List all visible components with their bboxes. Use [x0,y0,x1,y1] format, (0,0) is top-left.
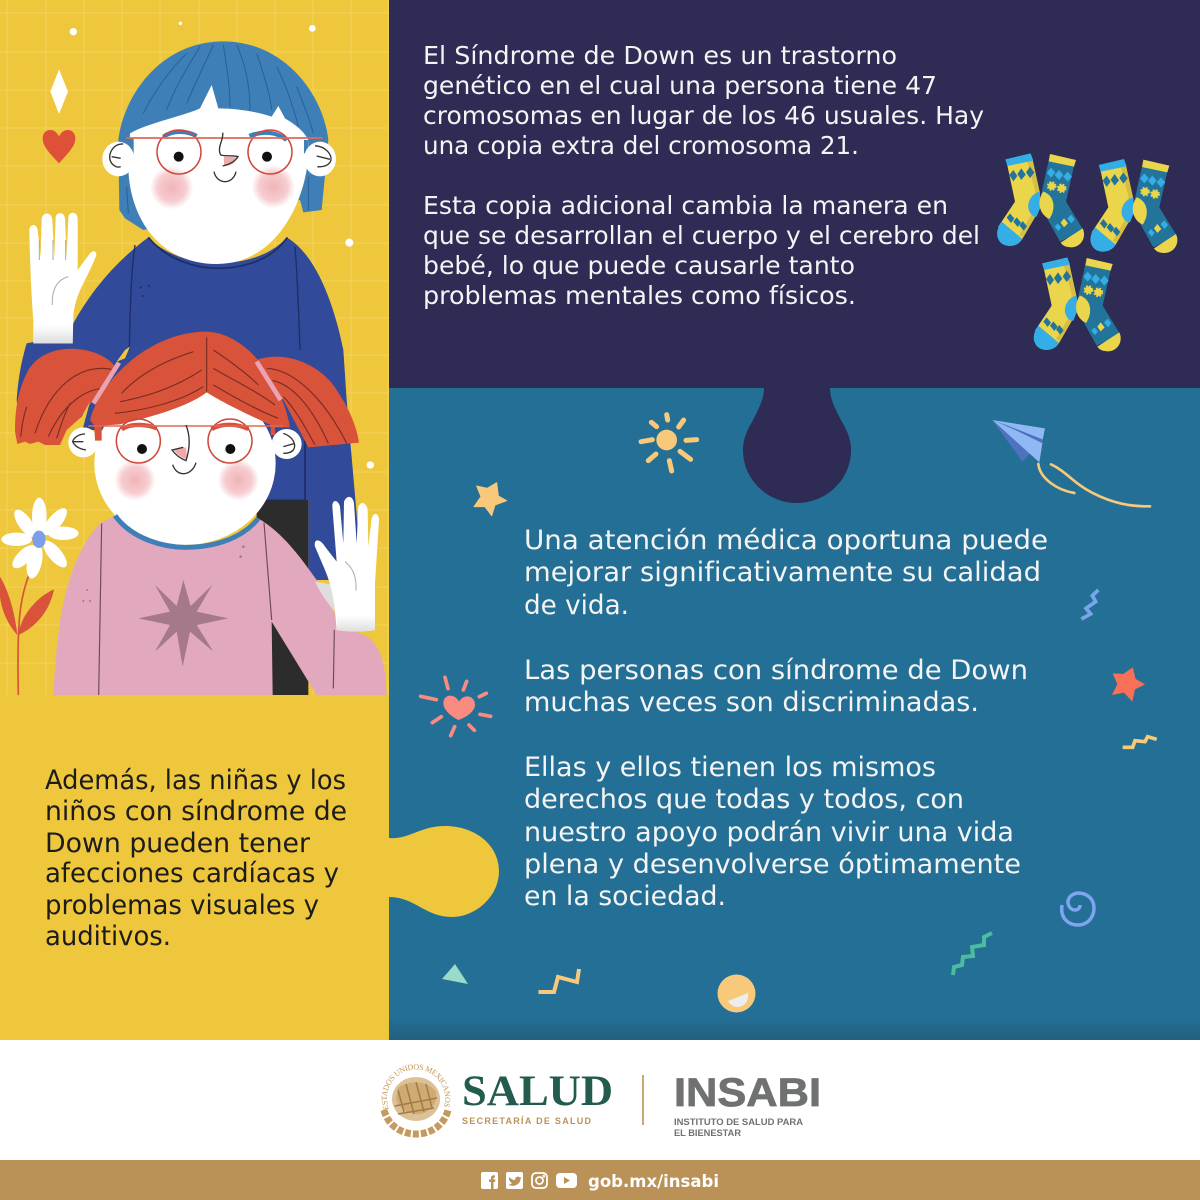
text: intro paragraph: El Síndrome de Down es un trastorno [423,41,897,70]
glasses [88,419,283,463]
hand right [315,582,334,612]
icon: red heart [43,130,75,163]
text: medical care [524,525,1048,621]
sweater [17,237,358,580]
text: second paragraph: Esta copia adicional cambia la manera en [423,191,948,220]
text: rights: Ellas y ellos tienen los mismos [524,752,936,783]
front hair [90,332,290,441]
logo: INSABI: INSABI [674,1071,821,1115]
dot [367,461,374,469]
text: rights: plena y desenvolverse óptimamente [524,849,1021,880]
social icons [481,1172,577,1189]
puzzle knob: yellow [389,826,499,917]
pigtails [15,349,115,445]
icon: blue zigzag [1081,590,1098,619]
icon: yellow zigzag bottom [538,969,579,992]
panel: lower blue [389,388,1200,1040]
text: intro paragraph: genético en el cual una persona tiene 47 [423,71,937,100]
text: discrimination [524,655,1028,718]
face [94,382,276,545]
panel: yellow under illustration [0,695,389,1040]
icon: red star [1112,667,1145,702]
nose and smile [173,447,187,459]
text: discrimination: muchas veces son discriminadas. [524,687,979,718]
nose and smile [224,157,237,166]
eyes [137,444,147,454]
text: intro paragraph: cromosomas en lugar de los 46 usuales. Hay [423,101,984,130]
logo: INSABI: EL BIENESTAR [674,1128,741,1139]
eyebrows [122,425,248,429]
divider [642,1075,644,1125]
logo: INSABI [674,1071,821,1139]
icon: heart with rays [421,677,491,736]
text: left column [45,765,347,952]
logo: coat of arms seal: ESTADOS UNIDOS MEXICANOS [382,1064,450,1110]
icon: sun [641,415,697,471]
eyebrows [163,132,197,137]
icon: green zigzag [953,933,992,975]
glasses [126,130,323,174]
icon: socks [997,153,1177,351]
ears [102,142,134,176]
logo: Salud: SALUD [462,1068,613,1115]
star on shirt [138,580,228,667]
shirt [53,516,387,695]
panel: white logo band [0,1040,1200,1160]
decor: dots [70,22,353,247]
text: medical care: mejorar significativamente su calidad [524,557,1041,588]
text: left column: auditivos. [45,921,171,952]
text: intro paragraph: una copia extra del cromosoma 21. [423,131,859,160]
text: left column: Down pueden tener [45,828,310,859]
cheeks [114,459,156,501]
icon: star yellow [474,483,507,516]
text: second paragraph: bebé, lo que puede causarle tanto [423,251,855,280]
panel: top navy [389,0,1200,388]
icon: instagram [532,1173,547,1188]
icon: smiling circle [718,974,756,1012]
icon: white diamond [50,69,68,114]
text: medical care: de vida. [524,590,629,621]
icon: spiral [1062,893,1094,925]
logo: Salud: SECRETARÍA DE SALUD [462,1116,592,1126]
text: second paragraph [423,191,980,310]
text: rights [524,752,1021,912]
puzzle knob: navy [743,388,851,503]
icon: paper plane [992,420,1150,506]
text: left column: problemas visuales y [45,890,319,921]
younger child [0,332,387,695]
text: left column: afecciones cardíacas y [45,858,339,889]
text: left column: Además, las niñas y los [45,765,346,796]
icon: teal triangle [442,964,468,984]
illustration: children waving [0,0,389,695]
text: discrimination: Las personas con síndrome de Down [524,655,1028,686]
logo: INSABI: INSTITUTO DE SALUD PARA [674,1117,803,1128]
panel: left yellow column [0,0,389,1040]
icon: youtube [556,1173,577,1188]
icon: yellow zigzag right [1123,737,1157,747]
hair [118,41,328,230]
hand left [29,213,96,343]
text: rights: derechos que todas y todos, con [524,784,964,815]
text: rights: nuestro apoyo podrán vivir una vida [524,817,1014,848]
scrunchies [93,362,281,403]
flower [18,563,33,695]
footer url: gob.mx/insabi [588,1172,719,1192]
icon: twitter [506,1172,523,1189]
logo: coat of arms seal [380,1064,452,1138]
text: rights: en la sociedad. [524,881,726,912]
text: medical care: Una atención médica oportuna puede [524,525,1048,556]
text: second paragraph: que se desarrollan el cuerpo y el cerebro del [423,221,980,250]
pants [257,500,308,695]
text: intro paragraph [423,41,984,160]
eyes [174,152,184,162]
older child [17,22,358,580]
text: second paragraph: problemas mentales como físicos. [423,281,856,310]
text: left column: niños con síndrome de [45,796,347,827]
cheeks [150,166,193,209]
face [128,85,309,264]
icon: facebook [481,1172,498,1189]
footer band [0,1160,1200,1200]
